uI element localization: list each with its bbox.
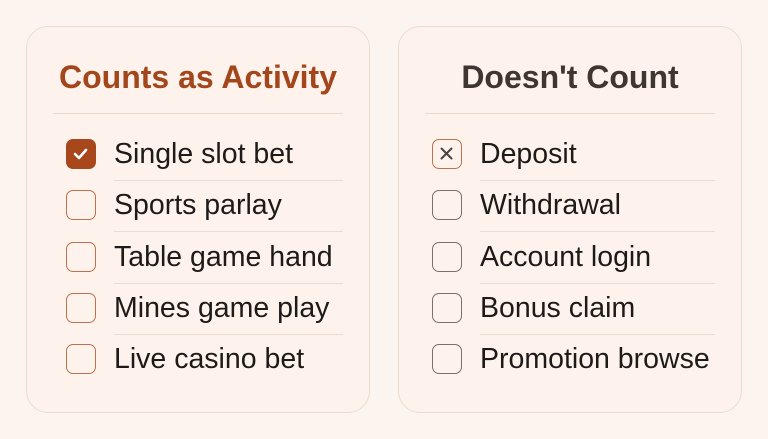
row: Mines game play xyxy=(66,292,343,335)
row: Deposit xyxy=(432,138,715,181)
row: Bonus claim: Bonus claim xyxy=(480,292,635,324)
row: Withdrawal xyxy=(432,189,715,232)
row: Single slot bet: Single slot bet xyxy=(114,138,293,170)
row: Sports parlay: Sports parlay xyxy=(114,189,282,221)
heading: Counts as Activity: Counts as Activity xyxy=(59,59,337,95)
row: Table game hand xyxy=(66,241,343,284)
row: Mines game play: Mines game play xyxy=(114,292,329,324)
row: Account login xyxy=(432,241,715,284)
row: Account login: Account login xyxy=(480,241,651,273)
panel: counts as activity xyxy=(26,26,370,413)
row: Deposit: Deposit xyxy=(480,138,577,170)
row: Withdrawal: Withdrawal xyxy=(480,189,621,221)
row: Single slot bet xyxy=(66,138,343,181)
row: Table game hand: Table game hand xyxy=(114,241,333,273)
row: Promotion browse: Promotion browse xyxy=(480,343,710,375)
row: Bonus claim xyxy=(432,292,715,335)
heading: Doesn't Count: Doesn't Count xyxy=(461,59,679,95)
row: Live casino bet: Live casino bet xyxy=(114,343,304,375)
panel: doesn't count xyxy=(398,26,742,413)
row: Sports parlay xyxy=(66,189,343,232)
